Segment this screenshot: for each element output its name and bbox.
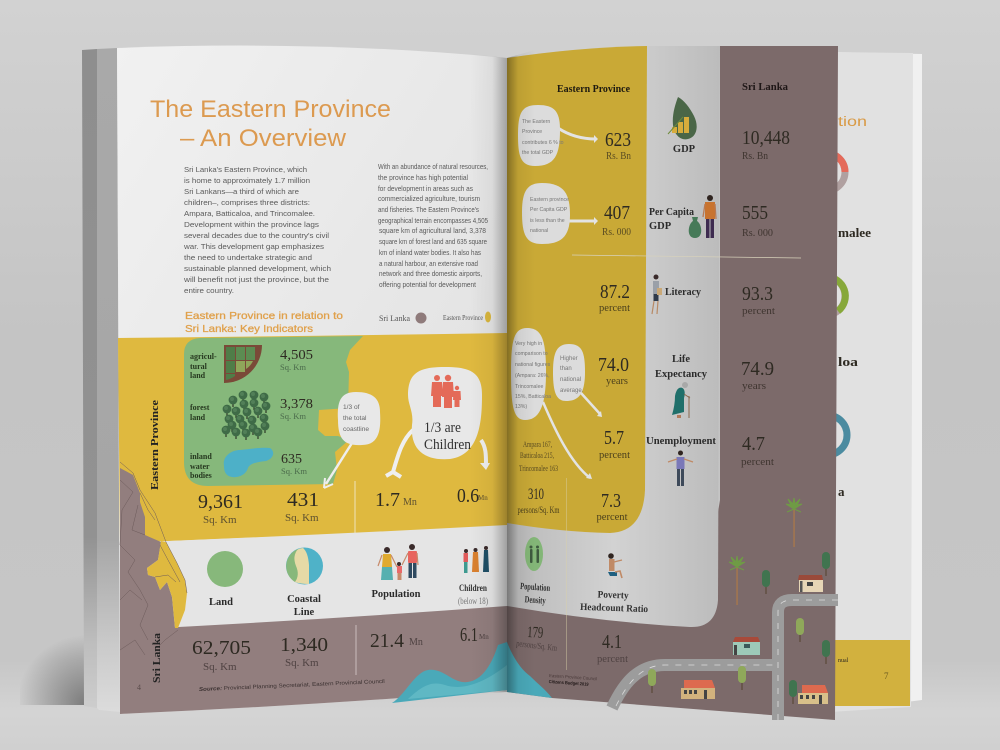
stat: agricultural land: Sq. Km [280, 362, 306, 372]
stat: poverty Eastern Province [596, 490, 628, 523]
icon: land circle [207, 551, 243, 587]
stat: GDP Sri Lanka: 10,448 [742, 127, 790, 149]
text block: density by district [519, 440, 558, 473]
brown Sri Lanka column and base [507, 46, 838, 720]
label: Poverty Headcount Ratio: Headcount Ratio [580, 602, 648, 615]
stat: land Sri Lanka [192, 637, 251, 673]
title: The Eastern Province [150, 96, 391, 123]
legend [379, 312, 491, 324]
back page footer strip: 7 [884, 671, 889, 681]
callout: unemployment higher than national: Higher [560, 356, 578, 362]
stat: poverty Eastern Province: percent [596, 511, 628, 523]
stat: poverty Sri Lanka [597, 631, 628, 665]
text block: column one: Sri Lanka's Eastern Province, which [184, 165, 307, 174]
text block: column two [378, 162, 488, 289]
text block: column two: and fisheries. The Eastern Province's [378, 205, 479, 214]
source line: Source: Provincial Planning Secretariat, Eastern Provincial Council [199, 679, 385, 693]
stat: GDP Eastern Province: 623 [605, 129, 631, 151]
stat: children Eastern Province: Mn [478, 494, 488, 502]
divider line [356, 625, 357, 675]
stat: population Sri Lanka: Mn [409, 637, 423, 648]
text block: density by district: Batticaloa 215, [520, 451, 554, 460]
stat: life expectancy Sri Lanka: 74.9 [741, 358, 774, 380]
callout: unemployment higher than national: than [560, 366, 572, 372]
callout: GDP share: contributes 6 % to [522, 140, 564, 146]
text block: column one: is home to approximately 1.7 million [184, 176, 310, 185]
icon: GDP island and chart [668, 97, 697, 139]
left page [117, 46, 838, 720]
back pages: left stack [82, 48, 120, 712]
text block: column one: the need to undertake strategic and [184, 253, 312, 262]
label: Eastern Province: Eastern Province [150, 400, 161, 490]
text block: column two: km of inland water bodies. It also has [379, 248, 481, 257]
back page footer strip [830, 640, 910, 706]
stat: population Sri Lanka: 21.4 [370, 630, 404, 652]
stat: unemployment Eastern Province: 5.7 [604, 427, 624, 449]
callout: coastline: coastline [343, 426, 369, 433]
text block: column one: will benefit not just the province, but the [183, 275, 329, 284]
stat: literacy Eastern Province: 87.2 [600, 281, 630, 303]
text block: column two: With an abundance of natural resources, [378, 162, 488, 171]
text block: column two: network and three domestic airports, [379, 269, 482, 278]
icon: children [464, 546, 489, 573]
icon: unemployed person [668, 450, 693, 486]
illustration: teal mountains, right page [507, 642, 552, 698]
page number: 4 [137, 683, 141, 692]
text block: column one: Ampara, Batticaloa, and Trincomalee. [184, 209, 315, 218]
label: inland water bodies [190, 452, 212, 480]
label: Children below 18: (below 18) [458, 596, 488, 607]
stat: population Eastern Province: 1.7 [375, 489, 400, 511]
callout: unemployment higher than national [553, 344, 602, 417]
label: Life Expectancy: Life [672, 354, 690, 365]
stat: population Eastern Province [375, 489, 417, 511]
text block: column one: Sri Lankans—a third of which are [184, 187, 299, 196]
stat: inland water [281, 452, 307, 476]
label: forest land [190, 403, 210, 422]
stat: unemployment Sri Lanka: 4.7 [742, 433, 765, 455]
text block: column one: Development within the province lags [184, 220, 319, 229]
stat: coast Eastern Province [285, 489, 319, 524]
label: Children below 18 [458, 584, 488, 607]
heading: Sri Lanka: Sri Lanka [742, 81, 788, 93]
stat: agricultural land: 4,505 [280, 348, 313, 363]
stat: forest land: Sq. Km [280, 411, 306, 421]
illustration: trees [648, 552, 830, 704]
text block: column two: for development in areas such as [378, 184, 473, 193]
callout: coastline: the total [343, 415, 367, 422]
stat: inland water: Sq. Km [281, 466, 307, 476]
stat: life expectancy Sri Lanka: years [742, 380, 766, 392]
callout: per capita GDP [522, 183, 598, 244]
green land shape [184, 336, 363, 486]
stat: GDP Eastern Province: Rs. Bn [606, 150, 631, 162]
label: Coastal Line: Coastal [287, 594, 321, 605]
stat: density Sri Lanka: 179 [527, 624, 544, 642]
stat: literacy Sri Lanka [742, 283, 775, 317]
callout: one third are children: Children [424, 437, 471, 453]
stat: coast Eastern Province: 431 [287, 489, 319, 511]
text block: column two: a natural harbour, an extensive road [379, 259, 478, 268]
illustration: houses [681, 575, 828, 704]
label: Ampara fragment: a [838, 484, 845, 499]
callout: unemployment higher than national: national [560, 377, 581, 383]
label: Per Capita GDP [649, 207, 695, 232]
stat: life expectancy Eastern Province: 74.0 [598, 354, 629, 376]
label: inland water bodies: inland [190, 452, 212, 461]
stat: poverty Sri Lanka: 4.1 [602, 631, 622, 653]
label: agricultural land: tural [190, 362, 208, 371]
stat: density Eastern Province: 310 [528, 486, 544, 503]
ring chart: red [807, 153, 845, 191]
icon: coastal line circle [286, 548, 323, 584]
back page footer strip: nual [838, 658, 849, 664]
label: Poverty Headcount Ratio: Poverty [597, 589, 629, 602]
icon: inland water [224, 448, 273, 477]
stat: forest land: 3,378 [280, 397, 313, 412]
text block: column two: commercialized agriculture, tourism [378, 194, 480, 203]
stat: literacy Eastern Province [599, 281, 630, 314]
callout: headcount ratio very high: national figures [515, 362, 551, 368]
stat: density Eastern Province [518, 486, 560, 515]
stat: forest land [280, 397, 313, 421]
text block: column one: sustainable planned development, which [184, 264, 331, 273]
stat: population Eastern Province: Mn [403, 497, 417, 508]
label: forest land: forest [190, 403, 210, 412]
text block: column two: offering potential for development [379, 280, 476, 289]
text block: density by district: Ampara 167, [523, 440, 552, 449]
legend: Sri Lanka [379, 314, 410, 323]
stat: density Eastern Province: persons/Sq. Km [518, 505, 560, 515]
text block: column one: several decades due to the country's civil [184, 231, 329, 240]
stat: inland water: 635 [281, 452, 302, 467]
yellow Eastern Province column [507, 46, 647, 533]
callout: per capita GDP: Eastern province [530, 197, 569, 203]
grey centre panel [507, 46, 720, 627]
label: Trincomalee fragment: malee [838, 225, 871, 240]
back page: right spread peeking out [807, 52, 922, 712]
label: Unemployment: Unemployment [646, 436, 716, 447]
label: agricultural land [190, 352, 217, 380]
icon: elderly woman [672, 382, 690, 418]
icon: population density [525, 537, 543, 571]
callout: one third are children: 1/3 are [424, 420, 461, 436]
illustration: palm trees [729, 498, 802, 605]
label: agricultural land: agricul- [190, 352, 217, 361]
callout: per capita GDP: national [530, 228, 548, 234]
label: inland water bodies: water [190, 462, 210, 471]
title [150, 96, 391, 152]
callout: headcount ratio very high [511, 328, 592, 479]
footer credit: Eastern Province Council [549, 673, 597, 681]
callout: headcount ratio very high: (Ampara: 26%, [515, 373, 550, 379]
stat: coast Eastern Province: Sq. Km [285, 512, 319, 524]
callout: GDP share: The Eastern [522, 119, 550, 125]
stat: children Sri Lanka: 6.1 [460, 624, 478, 646]
divider line [354, 481, 356, 536]
icon: literacy student [652, 274, 662, 314]
callout: headcount ratio very high: 15%, Batticaloa [515, 394, 551, 400]
text block: column one: entire country. [184, 286, 234, 295]
ring chart: green [807, 277, 845, 315]
title: – An Overview [180, 125, 347, 152]
label: Population Density [520, 582, 551, 607]
stat: life expectancy Eastern Province: years [606, 375, 628, 387]
ring chart: teal [807, 415, 847, 455]
stat: unemployment Sri Lanka [741, 433, 774, 468]
text block: density by district: Trincomalee 163 [519, 464, 558, 473]
icon: person with money bag [689, 195, 716, 238]
callout: per capita GDP: is less than the [530, 218, 565, 224]
stat: coast Sri Lanka [280, 634, 328, 669]
text block: column two: square km of forest land and 635 square [379, 237, 487, 246]
callout: one third are children [386, 367, 490, 477]
stat: GDP Eastern Province [605, 129, 631, 162]
label: Life Expectancy: Expectancy [655, 369, 708, 380]
heading: key indicators: Sri Lanka: Key Indicators [185, 323, 313, 335]
callout: headcount ratio very high: Trincomalee [515, 384, 543, 390]
label: Coastal Line: Line [294, 607, 315, 618]
stat: unemployment Eastern Province: percent [599, 449, 630, 461]
stat: poverty Eastern Province: 7.3 [601, 490, 621, 512]
stat: life expectancy Eastern Province [598, 354, 629, 387]
label: Poverty Headcount Ratio [580, 589, 648, 615]
text block: column two: the province has high potential [378, 173, 468, 182]
icon: agricultural land [224, 345, 262, 383]
icon: family [378, 544, 418, 580]
footer credit [549, 673, 597, 687]
callout: unemployment higher than national: average. [560, 388, 584, 394]
icon: sitting person [608, 553, 622, 578]
stat: per capita Sri Lanka: Rs. 000 [742, 227, 773, 239]
text block: column two: square km of agricultural land, 3,378 [379, 226, 486, 235]
book shadow on the left [20, 630, 84, 705]
label: Per Capita GDP: GDP [649, 221, 672, 232]
stat: coast Sri Lanka: 1,340 [280, 634, 328, 656]
label: Children below 18: Children [459, 584, 488, 594]
illustration: road network [612, 600, 838, 720]
text block: column one [183, 165, 331, 295]
callout: coastline: 1/3 of [343, 404, 360, 411]
heading: key indicators [185, 310, 343, 335]
legend: Eastern Province [443, 314, 483, 322]
stat: density Sri Lanka [516, 624, 558, 653]
stat: land Eastern Province: 9,361 [198, 491, 243, 513]
stat: per capita Eastern Province [602, 202, 631, 238]
label: Population Density: Population [520, 582, 551, 594]
callout: headcount ratio very high: Very high in [515, 341, 542, 347]
stat: density Sri Lanka: persons/Sq. Km [516, 638, 558, 653]
stat: literacy Sri Lanka: 93.3 [742, 283, 773, 305]
icon: forest [222, 391, 270, 440]
stat: land Sri Lanka: Sq. Km [203, 661, 237, 673]
stat: GDP Sri Lanka [742, 127, 790, 162]
label: Population Density: Density [524, 595, 546, 607]
label: Life Expectancy [655, 354, 708, 380]
stat: GDP Sri Lanka: Rs. Bn [742, 150, 768, 162]
callout: GDP share: Province [522, 129, 542, 135]
label: Population: Population [371, 589, 421, 600]
callout: GDP share: the total GDP [522, 150, 554, 156]
panel: brown Sri Lanka band [120, 606, 507, 714]
panel: white indicator band [120, 525, 507, 630]
callout: headcount ratio very high: 13%) [515, 404, 527, 410]
label: agricultural land: land [190, 371, 206, 380]
divider line [572, 255, 801, 258]
heading: key indicators: Eastern Province in relation to [185, 310, 343, 322]
label: GDP: GDP [673, 144, 696, 155]
footer credit: Citizens Budget 2019 [549, 679, 589, 687]
stat: per capita Sri Lanka [742, 202, 773, 239]
map of Sri Lanka [120, 462, 187, 655]
text block: column one: children–, comprises three districts: [184, 198, 310, 207]
callout: GDP share [518, 105, 598, 166]
text block: column one: war. This development gap emphasizes [183, 242, 324, 251]
stat: unemployment Sri Lanka: percent [741, 456, 774, 468]
stat: children Eastern Province: 0.6 [457, 485, 479, 507]
label: forest land: land [190, 413, 206, 422]
label: Batticaloa fragment: loa [838, 354, 859, 369]
callout: headcount ratio very high: comparison to [515, 351, 548, 357]
stat: land Eastern Province: Sq. Km [203, 514, 237, 526]
divider line [565, 478, 568, 670]
stat: unemployment Eastern Province [599, 427, 630, 461]
callout: coastline [324, 392, 380, 488]
stat: land Sri Lanka: 62,705 [192, 637, 251, 659]
callout: per capita GDP: Per Capita GDP [530, 207, 568, 213]
stat: per capita Eastern Province: 407 [604, 202, 630, 224]
stat: literacy Sri Lanka: percent [742, 305, 775, 317]
stat: literacy Eastern Province: percent [599, 302, 630, 314]
label: Land: Land [209, 597, 233, 608]
heading: Eastern Province: Eastern Province [557, 84, 630, 95]
illustration: teal mountains [392, 642, 507, 703]
label: Coastal Line [287, 594, 321, 618]
stat: agricultural land [280, 348, 313, 372]
stat: poverty Sri Lanka: percent [597, 653, 628, 665]
label: inland water bodies: bodies [190, 471, 212, 480]
stat: population Sri Lanka [370, 630, 423, 652]
spine shadow: right [507, 50, 535, 696]
stat: per capita Eastern Province: Rs. 000 [602, 226, 631, 238]
spine shadow: left [470, 54, 507, 694]
icon: family figures [431, 375, 461, 408]
stat: children Sri Lanka: Mn [479, 633, 489, 641]
label: Per Capita GDP: Per Capita [649, 207, 695, 218]
stat: land Eastern Province [198, 491, 243, 526]
text block: column two: geographical terrain encompasses 4,505 [378, 216, 488, 225]
panel: yellow Eastern Province band [118, 54, 507, 714]
label: Literacy: Literacy [665, 287, 702, 298]
stat: coast Sri Lanka: Sq. Km [285, 657, 319, 669]
back page heading fragment: tion [838, 114, 867, 129]
stat: life expectancy Sri Lanka [741, 358, 774, 392]
label: Sri Lanka: Sri Lanka [152, 632, 163, 683]
right page [507, 46, 838, 720]
stat: per capita Sri Lanka: 555 [742, 202, 768, 224]
